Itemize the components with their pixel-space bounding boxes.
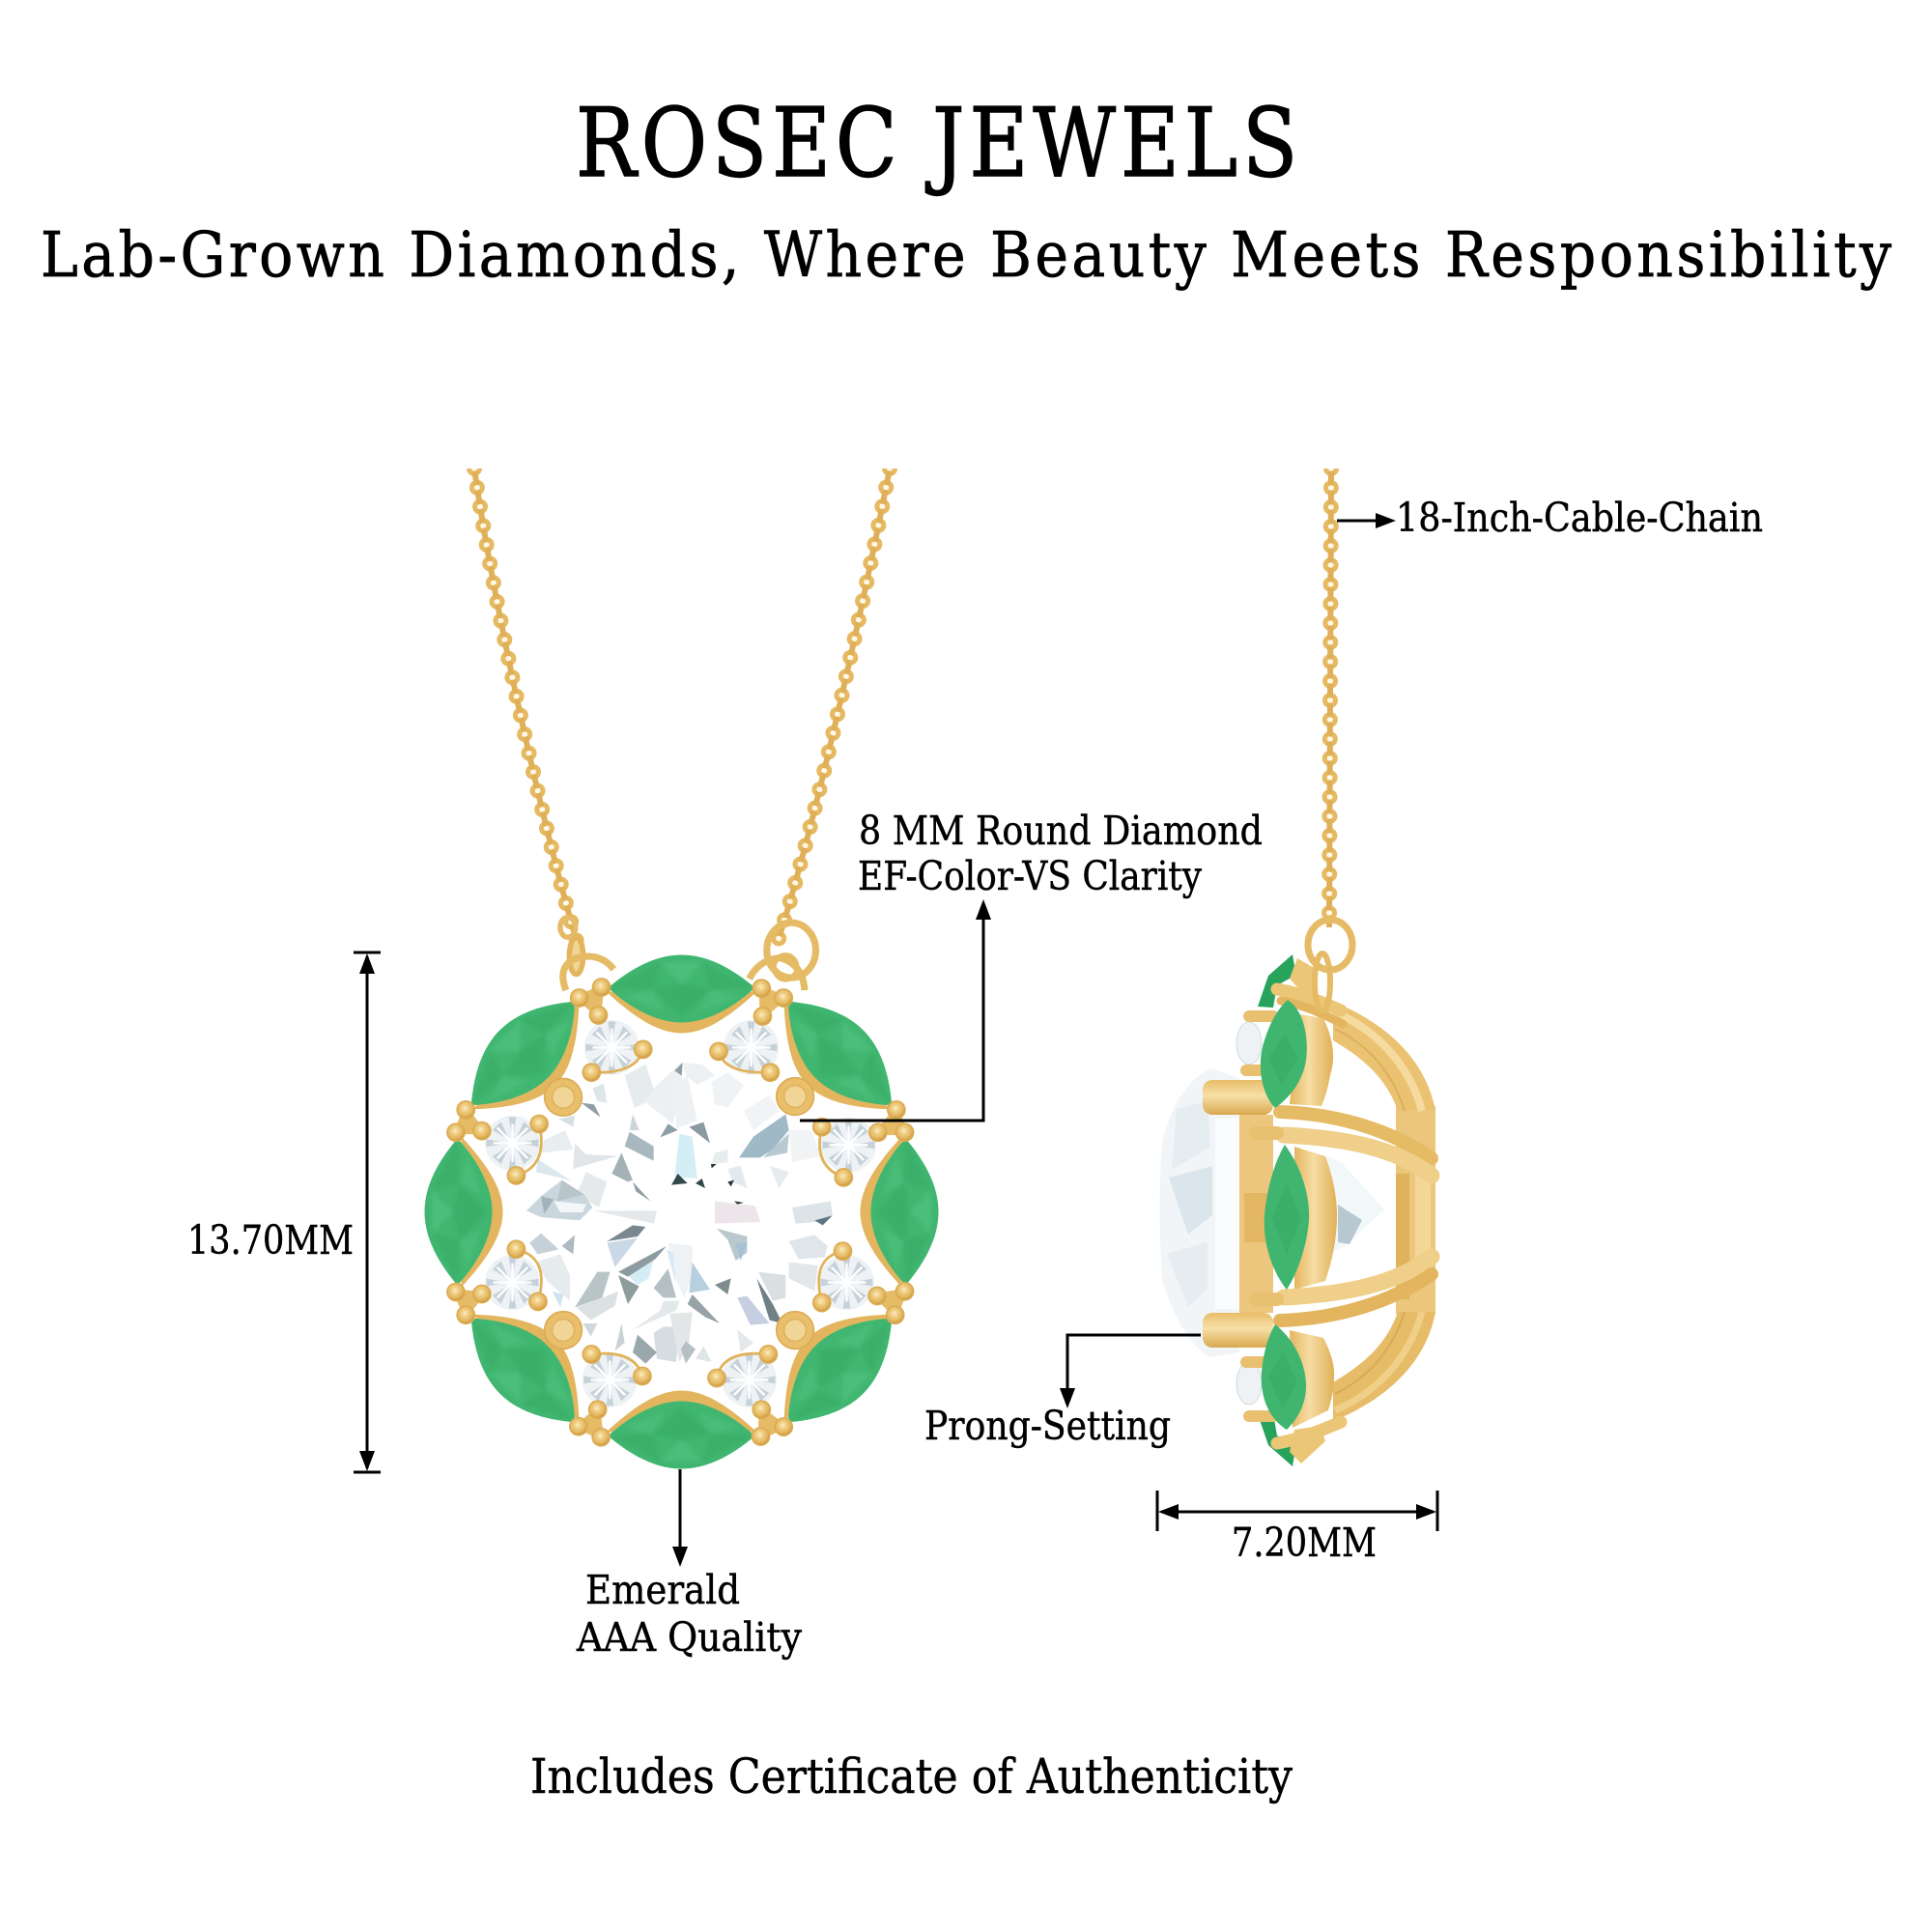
back emeralds xyxy=(1258,954,1325,1466)
label: prong: Prong-Setting xyxy=(924,1403,1171,1449)
gold wires and small prongs xyxy=(1246,989,1432,1443)
gold back plate and bezels xyxy=(1239,1014,1337,1428)
callout: prong setting xyxy=(924,1335,1201,1449)
label: diamond specs: 8 MM Round Diamond xyxy=(859,808,1263,854)
central round diamond xyxy=(525,1058,834,1367)
rear gold frame xyxy=(1333,1002,1435,1421)
side view chain xyxy=(1329,469,1331,927)
side view rings xyxy=(1308,920,1352,1011)
marquise emeralds xyxy=(425,954,939,1468)
gold seats and bead connectors xyxy=(456,987,905,1437)
jump rings and bails xyxy=(560,918,815,990)
label: diamond specs xyxy=(858,808,1263,899)
pendant side view xyxy=(1159,920,1435,1466)
small side diamonds xyxy=(1236,1022,1264,1405)
label: emerald quality xyxy=(576,1567,803,1661)
label: emerald quality: AAA Quality xyxy=(576,1614,803,1661)
subtitle: Lab-Grown Diamonds, Where Beauty Meets Responsibility xyxy=(41,218,1891,292)
label: diamond specs: EF-Color-VS Clarity xyxy=(858,853,1203,899)
label: chain: 18-Inch-Cable-Chain xyxy=(1396,495,1763,541)
crown of central gemstone xyxy=(1159,1068,1239,1357)
footer note: Includes Certificate of Authenticity xyxy=(530,1748,1293,1804)
gemstone pavilion xyxy=(1326,1154,1384,1254)
gold beads xyxy=(446,978,914,1447)
necklace chain: left strand xyxy=(474,469,580,952)
label: height: 13.70MM xyxy=(187,1217,354,1264)
large diamond prongs xyxy=(545,1078,813,1349)
large horizontal prongs xyxy=(1203,1080,1273,1348)
title: ROSEC JEWELS xyxy=(576,90,1297,199)
label: emerald quality: Emerald xyxy=(585,1567,740,1613)
dimension: 13.70MM height xyxy=(187,952,381,1472)
dimension: 7.20MM width xyxy=(1157,1491,1437,1566)
callout: chain xyxy=(1337,495,1763,541)
label: width: 7.20MM xyxy=(1232,1520,1377,1566)
small round diamonds xyxy=(485,1020,876,1407)
pendant front view xyxy=(425,918,939,1468)
side emeralds xyxy=(1261,1000,1309,1430)
callout: emerald xyxy=(576,1469,803,1661)
necklace chain: right strand xyxy=(779,469,890,939)
callout: round diamond xyxy=(800,808,1263,1121)
